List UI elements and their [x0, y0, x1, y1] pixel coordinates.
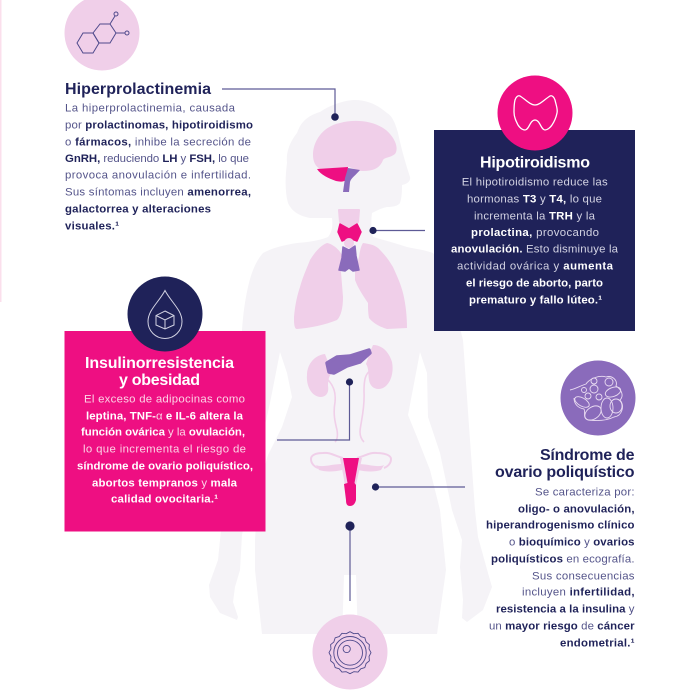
organ: uterus and ovaries [311, 453, 391, 506]
heading: hipotiroidismo: Hipotiroidismo [480, 154, 590, 172]
text block: insulinorresistencia y obesidad: El exceso de adipocinas como [84, 394, 245, 406]
text block: hipotiroidismo: prolactina, provocando [471, 227, 599, 239]
text block: sindrome de ovario poliquistico: o bioquímico y ovarios [509, 536, 634, 548]
icon: molecule [64, 0, 140, 70]
text block: insulinorresistencia y obesidad [77, 394, 253, 506]
text block: sindrome de ovario poliquistico: resistencia a la insulina y [496, 604, 635, 616]
text block: sindrome de ovario poliquistico: incluyen infertilidad, [522, 586, 634, 598]
text block: sindrome de ovario poliquistico: oligo- o anovulación, [518, 504, 634, 516]
heading: sindrome de ovario poliquistico [495, 447, 635, 481]
text block: hiperprolactinemia: visuales.¹ [65, 220, 119, 232]
connector: uterus to sindrome de ovario poliquistico [372, 483, 465, 491]
text block: sindrome de ovario poliquistico: un mayor riesgo de cáncer [489, 620, 635, 632]
connector: pancreas to insulinorresistencia [277, 378, 353, 440]
text block: hiperprolactinemia: Sus síntomas incluyen amenorrea, [65, 186, 251, 198]
heading: insulinorresistencia y obesidad: Insulinorresistencia [85, 355, 234, 372]
text block: sindrome de ovario poliquistico: Sus consecuencias [532, 570, 635, 582]
text block: hipotiroidismo: hormonas T3 y T4, lo que [467, 194, 602, 206]
text block: hipotiroidismo [451, 176, 619, 306]
icon: thyroid [498, 76, 572, 150]
panel: hipotiroidismo [434, 76, 635, 331]
text block: hipotiroidismo: incrementa la TRH y la [474, 210, 596, 222]
female body silhouette [209, 100, 492, 640]
text block: hiperprolactinemia: galactorrea y alteraciones [65, 204, 211, 216]
organ: lungs and thymus [294, 243, 407, 329]
text block: sindrome de ovario poliquistico: endometrial.¹ [560, 638, 635, 650]
heading: hiperprolactinemia: Hiperprolactinemia [65, 81, 211, 98]
heading: sindrome de ovario poliquistico: ovario poliquístico [495, 464, 635, 481]
text block: hipotiroidismo: El hipotiroidismo reduce las [462, 176, 608, 188]
panel: hiperprolactinemia [64, 0, 253, 232]
heading: insulinorresistencia y obesidad: y obesidad [119, 372, 200, 389]
text block: insulinorresistencia y obesidad: síndrome de ovario poliquístico, [77, 460, 253, 472]
panel: sindrome de ovario poliquistico [486, 360, 636, 650]
heading: insulinorresistencia y obesidad [85, 355, 234, 389]
heading: sindrome de ovario poliquistico: Síndrome de [540, 447, 635, 464]
connector: lower dot to egg icon [345, 521, 355, 601]
text block: insulinorresistencia y obesidad: lo que incrementa el riesgo de [83, 444, 246, 456]
text block: hipotiroidismo: actividad ovárica y aumenta [457, 260, 614, 272]
text block: sindrome de ovario poliquistico [486, 486, 635, 650]
connector: thyroid to hipotiroidismo [369, 227, 425, 234]
text block: hipotiroidismo: el riesgo de aborto, parto [466, 278, 603, 290]
icon: drop with cube [128, 276, 202, 352]
text block: insulinorresistencia y obesidad: función ovárica y la ovulación, [81, 426, 245, 438]
text block: insulinorresistencia y obesidad: calidad ovocitaria.¹ [111, 494, 218, 506]
text block: insulinorresistencia y obesidad: leptina, TNF-α e IL-6 altera la [86, 410, 244, 422]
organ: larynx and thyroid [338, 210, 361, 248]
text block: sindrome de ovario poliquistico: hiperandrogenismo clínico [486, 520, 635, 532]
text block: hiperprolactinemia: GnRH, reduciendo LH y FSH, lo que [65, 153, 249, 165]
text block: hiperprolactinemia: o fármacos, inhibe la secreción de [65, 136, 251, 148]
text block: hiperprolactinemia: provoca anovulación e infertilidad. [65, 170, 251, 182]
text block: hipotiroidismo: anovulación. Esto disminuye la [451, 244, 619, 256]
text block: hiperprolactinemia [65, 102, 253, 232]
icon: polycystic ovary [560, 360, 636, 436]
connector: hiperprolactinemia to brain [222, 89, 339, 121]
text block: hiperprolactinemia: por prolactinomas, hipotiroidismo [65, 120, 253, 132]
text block: insulinorresistencia y obesidad: abortos tempranos y mala [92, 478, 238, 490]
icon: egg cell [312, 614, 388, 690]
text block: sindrome de ovario poliquistico: poliquísticos en ecografía. [491, 554, 634, 566]
text block: sindrome de ovario poliquistico: Se caracteriza por: [535, 486, 634, 498]
organ: kidneys, ureters and pancreas [307, 345, 393, 442]
organ: brain [313, 121, 397, 192]
text block: hipotiroidismo: prematuro y fallo lúteo.¹ [469, 294, 602, 306]
panel: insulinorresistencia y obesidad [64, 276, 266, 532]
text block: hiperprolactinemia: La hiperprolactinemia, causada [65, 102, 236, 114]
